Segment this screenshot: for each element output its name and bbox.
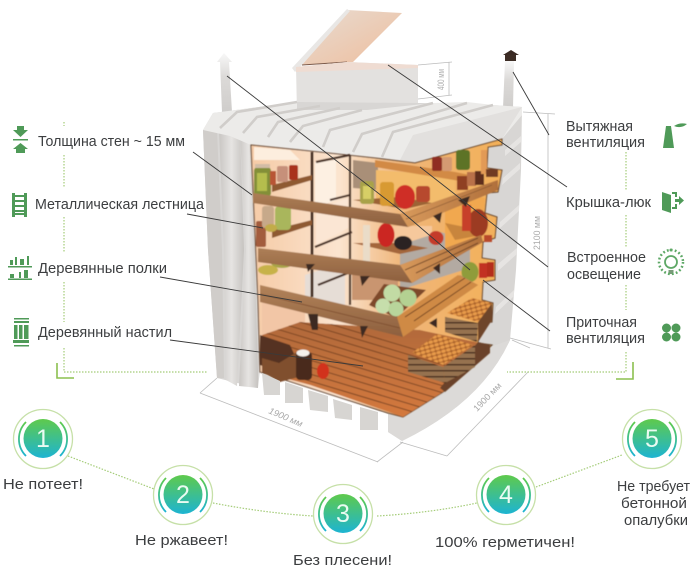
icon: shelves	[8, 256, 32, 280]
badge 3: 3	[336, 500, 350, 528]
label: Без плесени!	[293, 553, 392, 569]
icon: fan	[662, 324, 680, 342]
cellar illustration	[203, 9, 522, 441]
shelf 2	[258, 235, 483, 283]
label: Толщина стен ~ 15 мм	[38, 134, 185, 150]
crate of carrots front	[408, 334, 475, 383]
floor	[262, 322, 478, 418]
dimension 400 mm: 400 мм	[436, 69, 446, 90]
crate of carrots back	[445, 298, 492, 342]
back shelves	[272, 160, 482, 254]
feature: built-in lighting	[567, 248, 683, 283]
ladder	[312, 152, 352, 305]
dimension 1900 mm left: 1900 мм	[267, 406, 304, 429]
back walls	[251, 139, 502, 417]
left wall ribs	[203, 130, 258, 388]
icon: decking	[13, 318, 29, 346]
lit wall panels	[254, 147, 485, 340]
badge 5: 5	[645, 425, 659, 453]
label	[617, 479, 690, 529]
label: Вытяжная	[566, 119, 633, 135]
feature: wall thickness	[13, 126, 185, 153]
label: опалубки	[624, 513, 688, 529]
icon: chimney with smoke	[663, 123, 687, 148]
feature: supply ventilation: вентиляция	[566, 331, 645, 347]
icon: light bulb	[659, 248, 683, 274]
benefit 3	[293, 484, 392, 569]
dark floor strip	[440, 342, 490, 392]
feature: supply ventilation	[566, 315, 680, 347]
interior	[250, 139, 502, 438]
right wall ribs	[495, 136, 521, 314]
dimension lines	[200, 62, 555, 462]
jars upper left	[254, 164, 298, 197]
badge 2: 2	[176, 481, 190, 509]
feature: wooden shelves	[8, 256, 167, 280]
label: Не ржавеет!	[135, 533, 228, 549]
crate lower left	[260, 335, 310, 382]
icon: wall thickness arrows	[13, 126, 28, 153]
feature: wooden decking	[13, 318, 172, 346]
dimension 400 mm	[418, 62, 452, 99]
icon: door with arrow	[662, 192, 684, 213]
badge 4: 4	[499, 481, 513, 509]
red vegetables right	[462, 205, 494, 278]
dimension 1900 mm left	[200, 378, 403, 462]
label: Крышка-люк	[566, 195, 652, 211]
dimension 2100 mm	[510, 112, 555, 349]
label: Не требует	[617, 479, 690, 495]
cabbage crate	[369, 284, 426, 318]
dimension 1900 mm right	[400, 340, 530, 456]
icon: ladder	[12, 193, 27, 217]
dimension 1900 mm right: 1900 мм	[471, 381, 503, 413]
dotted connector line	[68, 455, 622, 516]
hatch lid	[292, 9, 418, 113]
right vent pipe with cap	[503, 50, 519, 108]
label: Приточная	[566, 315, 637, 331]
label: 100% герметичен!	[435, 535, 575, 551]
left vent pipe	[217, 53, 232, 112]
label: Не потеет!	[3, 477, 83, 493]
label: Встроенное	[567, 250, 646, 266]
benefit 1	[3, 410, 83, 493]
badge 1: 1	[36, 425, 50, 453]
shelf 1	[253, 180, 498, 227]
jar and pepper on floor	[296, 350, 329, 380]
right dotted frame	[507, 152, 633, 379]
jars center	[360, 181, 430, 209]
brackets	[306, 196, 470, 338]
label: Деревянный настил	[38, 325, 172, 341]
label: бетонной	[621, 496, 687, 512]
benefit 2	[135, 466, 228, 549]
feature: built-in lighting: освещение	[567, 267, 641, 283]
feature: exhaust ventilation: вентиляция	[566, 135, 645, 151]
dimension 2100 mm: 2100 мм	[532, 216, 542, 250]
benefit 4	[435, 466, 575, 551]
feature: exhaust ventilation	[566, 119, 687, 151]
bottom concrete teeth	[262, 373, 378, 430]
feature: metal ladder	[12, 193, 205, 217]
curved base band	[388, 340, 510, 441]
left dotted frame	[57, 122, 207, 378]
lower jars and produce	[256, 206, 478, 282]
leader lines	[160, 65, 567, 366]
feature: hatch lid	[566, 192, 684, 213]
jars top right	[432, 150, 498, 190]
concrete body	[203, 102, 522, 441]
benefit 5	[617, 410, 690, 529]
label: Деревянные полки	[38, 261, 167, 277]
shelf 3	[260, 275, 478, 337]
label: Металлическая лестница	[35, 197, 205, 213]
roof	[203, 102, 522, 163]
